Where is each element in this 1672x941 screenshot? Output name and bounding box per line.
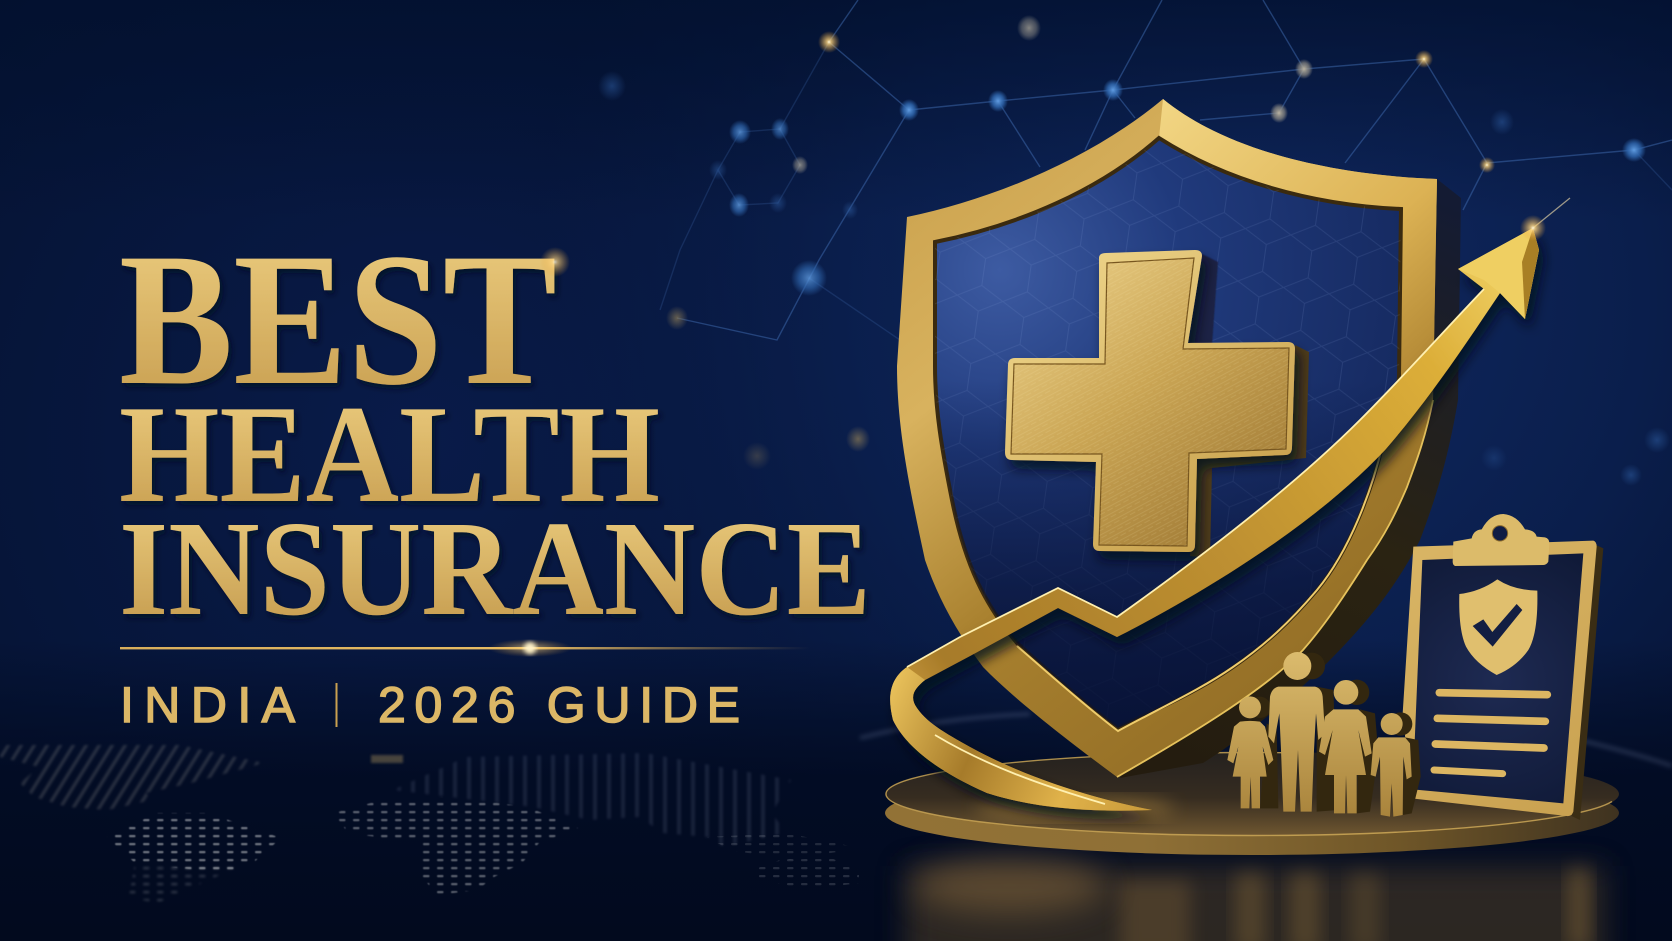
ribbon tail — [890, 667, 1152, 811]
cross brushed texture — [1011, 258, 1289, 546]
title line: BEST: BEST — [119, 215, 557, 425]
shield rim bright edges — [1017, 443, 1383, 731]
clip hole — [1492, 526, 1508, 541]
cross rim — [1005, 250, 1295, 552]
clipboard — [1403, 514, 1603, 820]
cross 3D side: upper arm — [1188, 254, 1218, 345]
clipboard clip — [1453, 514, 1549, 566]
rising arrow ribbon — [890, 198, 1570, 811]
ribbon highlight — [907, 289, 1484, 804]
floor reflection — [860, 714, 1672, 941]
girl — [1227, 696, 1273, 808]
shield blue panel — [935, 138, 1401, 728]
subtitle: 2026 Guide: 2026 GUIDE — [378, 677, 740, 733]
clipboard lines — [1434, 693, 1547, 774]
clipboard shield badge — [1459, 579, 1537, 675]
arrow tip sparkle — [1520, 198, 1570, 241]
arrow head — [1458, 228, 1533, 319]
family icon — [1227, 652, 1421, 817]
cross face — [1011, 258, 1289, 546]
divider rule with glow — [120, 639, 810, 657]
title line: HEALTH: HEALTH — [119, 377, 660, 532]
cross — [1005, 250, 1309, 558]
subtitle — [120, 677, 740, 733]
honeycomb texture — [930, 130, 1410, 730]
shield 3D side — [1120, 179, 1461, 778]
title line: INSURANCE: INSURANCE — [119, 494, 871, 644]
network nodes — [598, 15, 1670, 486]
arrow head side — [1522, 228, 1539, 319]
clipboard dark side — [1572, 541, 1603, 820]
ribbon body — [890, 228, 1539, 811]
title sparkle — [540, 247, 570, 277]
clipboard gold frame — [1403, 541, 1597, 816]
family dark sides — [1249, 653, 1421, 815]
shield gold frame — [897, 99, 1437, 777]
title — [119, 215, 871, 644]
subtitle: India: INDIA — [120, 677, 296, 733]
dotted world map — [0, 745, 860, 903]
check mark — [1473, 604, 1522, 647]
boy — [1371, 713, 1412, 817]
subtitle separator — [336, 683, 338, 727]
clipboard panel — [1413, 553, 1583, 803]
woman — [1319, 680, 1372, 813]
man — [1268, 652, 1325, 812]
shield — [897, 99, 1461, 778]
shield top highlight — [1159, 99, 1437, 400]
cross 3D side: right and lower arms — [1190, 345, 1309, 558]
network constellation — [598, 0, 1672, 486]
gold base disc — [885, 752, 1619, 855]
